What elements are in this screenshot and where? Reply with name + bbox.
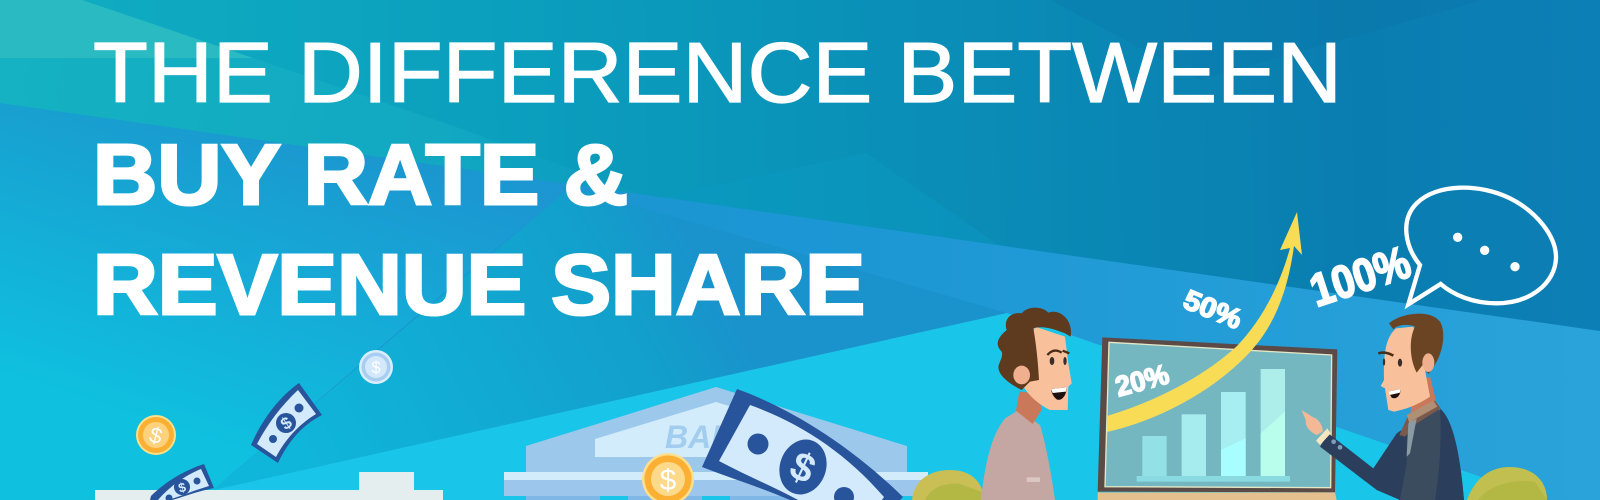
monitor with bar chart bbox=[1098, 337, 1337, 500]
icon: bank coin: $ bbox=[660, 464, 677, 497]
sweater bbox=[981, 410, 1055, 500]
title line: revenue share: REVENUE SHARE bbox=[93, 238, 865, 333]
icon: small banknote: $ bbox=[177, 479, 188, 496]
icon: left chair bbox=[912, 470, 982, 500]
icon: gold coin bbox=[136, 415, 176, 455]
suit arm bbox=[1320, 427, 1407, 500]
bar chart bbox=[1137, 369, 1290, 482]
title bbox=[93, 26, 1342, 333]
suit body bbox=[1400, 407, 1464, 500]
icon: bank coin bbox=[642, 453, 694, 500]
icon: large banknote bbox=[702, 389, 903, 500]
icon: flying banknote: $ bbox=[277, 413, 296, 434]
icon: blue coin: $ bbox=[371, 358, 381, 377]
icon: white building bbox=[95, 472, 443, 500]
icon: gold coin: $ bbox=[147, 422, 165, 449]
neck bbox=[1410, 377, 1437, 418]
icon: flying banknote bbox=[251, 383, 322, 463]
collar bbox=[1399, 401, 1441, 437]
speech bubble bbox=[1406, 188, 1556, 304]
title line: the difference between: THE DIFFERENCE BETWEEN bbox=[93, 26, 1342, 121]
icon: right chair bbox=[1467, 467, 1547, 500]
icon: large banknote: $ bbox=[783, 443, 822, 493]
mouth bbox=[1388, 389, 1401, 398]
head bbox=[1022, 327, 1072, 410]
bank sign text: BANK bbox=[665, 419, 760, 455]
desk bbox=[1098, 492, 1337, 500]
head bbox=[1381, 327, 1430, 412]
label: 100%: 100% bbox=[1303, 236, 1417, 316]
icon: small banknote bbox=[150, 464, 214, 500]
left man bbox=[981, 308, 1072, 500]
growth arrow bbox=[1107, 212, 1302, 432]
hair bbox=[1389, 314, 1443, 374]
mouth bbox=[1051, 387, 1067, 400]
title line: buy rate: BUY RATE & bbox=[93, 128, 628, 223]
label: 50%: 50% bbox=[1179, 284, 1247, 335]
icon: bank building bbox=[504, 387, 928, 500]
pointing hand bbox=[1302, 410, 1323, 435]
icon: blue coin bbox=[359, 350, 393, 384]
label: 20%: 20% bbox=[1112, 358, 1172, 402]
right man bbox=[1302, 314, 1464, 500]
hair bbox=[998, 308, 1071, 390]
